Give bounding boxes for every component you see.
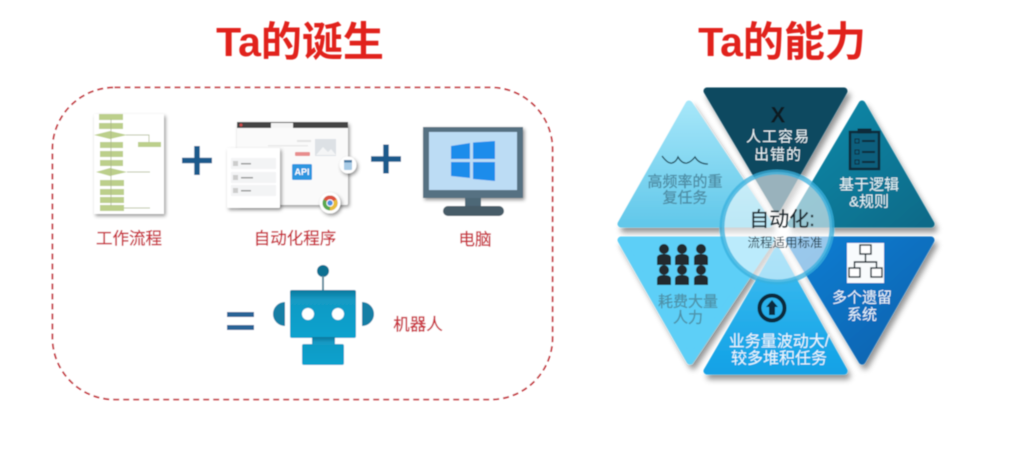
icon: plus sign 1 xyxy=(182,146,212,175)
segment: logic and rules xyxy=(791,104,931,224)
icon: workflow document xyxy=(94,114,164,214)
center circle: automation: 自动化: xyxy=(749,208,815,231)
icon: people group xyxy=(657,244,708,285)
segment: volume fluctuation xyxy=(707,251,844,371)
panel: dashed formula frame xyxy=(52,88,552,400)
label: 工作流程: 工作流程 xyxy=(96,229,162,248)
label: 机器人: 机器人 xyxy=(393,315,443,334)
segment: high frequency tasks: 复任务 xyxy=(662,188,708,206)
label: 电脑: 电脑 xyxy=(458,230,492,249)
icon: calendar bubble xyxy=(340,156,356,174)
segment: error prone: X xyxy=(771,102,786,128)
diagram: automation hexagon xyxy=(621,91,931,371)
segment: legacy systems xyxy=(789,240,931,361)
segment: legacy systems: 多个遗留 xyxy=(832,290,892,306)
segment: volume fluctuation: 较多堆积任务 xyxy=(731,350,827,368)
segment: high frequency tasks xyxy=(621,104,769,224)
segment: labor intensive: 耗费大量 xyxy=(658,294,718,310)
segment: error prone xyxy=(707,91,844,209)
segment: volume fluctuation: 业务量波动大/ xyxy=(729,332,830,350)
icon: network tree xyxy=(847,243,884,283)
label: 自动化程序: 自动化程序 xyxy=(254,229,336,248)
icon: API badge: API xyxy=(294,167,310,177)
panel: page list card xyxy=(227,148,280,208)
title: Ta的能力: Ta的能力 xyxy=(698,19,866,65)
center circle: automation xyxy=(722,172,832,282)
center circle: automation: 流程适用标准 xyxy=(747,235,823,250)
segment: labor intensive: 人力 xyxy=(673,310,703,326)
segment: error prone: 出错的 xyxy=(754,146,802,164)
segment: logic and rules: 基于逻辑 xyxy=(839,176,899,194)
icon: automation program window xyxy=(227,122,356,214)
icon: robot xyxy=(273,265,374,365)
title: Ta的诞生: Ta的诞生 xyxy=(216,19,384,65)
icon: equals sign xyxy=(227,314,254,328)
icon: computer monitor xyxy=(423,127,523,216)
segment: error prone: 人工容易 xyxy=(746,128,810,146)
icon: plus sign 2 xyxy=(371,144,401,174)
icon: chrome logo xyxy=(320,192,340,214)
segment: legacy systems: 系统 xyxy=(847,306,877,324)
icon: up arrow circle xyxy=(760,296,784,320)
icon: wave xyxy=(662,156,708,164)
icon: clipboard xyxy=(850,129,879,169)
segment: high frequency tasks: 高频率的重 xyxy=(647,174,723,190)
segment: labor intensive xyxy=(621,240,771,361)
segment: logic and rules: &规则 xyxy=(849,194,889,210)
